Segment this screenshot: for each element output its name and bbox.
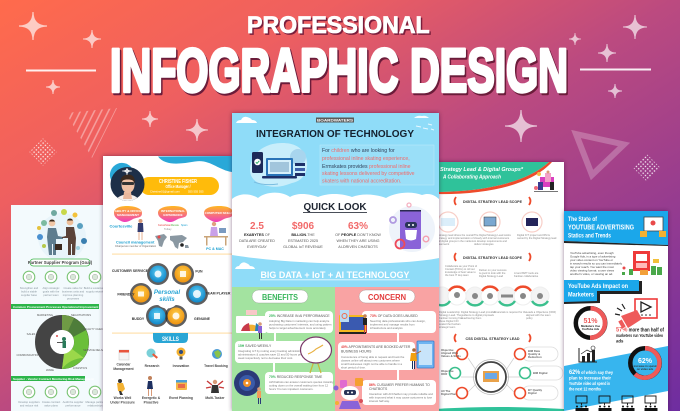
cloud bottom left [235, 262, 255, 269]
illustration: team at work [534, 170, 558, 192]
stat: 62 percent [569, 369, 613, 392]
section pill: second scope: DIGITAL STRATEGY LEAD SCOPE [463, 256, 522, 260]
scope text [439, 234, 556, 246]
ribbon heading: YouTube Ads Impact on [568, 283, 628, 290]
stat: exabytes: EVERYDAY [247, 245, 267, 249]
icons: top circle row [23, 271, 101, 283]
outlined triangle decoration [576, 134, 624, 175]
stat: chatbots [335, 221, 381, 249]
stat: 62 percent: 62% of which say they [569, 369, 613, 376]
world map: Turkey [164, 228, 172, 231]
illustration: dial [234, 370, 261, 404]
blob headings: MANAGEMENT [117, 213, 139, 217]
scope text: closely with internal customers [474, 236, 510, 240]
panel: partner supplier infographic [11, 205, 111, 411]
process text: Digital Leadership [439, 310, 460, 314]
card: response time: cutting down on the overall waiting time from 12 [269, 384, 329, 388]
curved header: A Collaborating Approach [442, 174, 501, 180]
text: goal descriptions: supplier base [21, 293, 37, 297]
skills heading: SKILLS [162, 336, 179, 343]
world map: Spain [181, 224, 188, 227]
stat: iot revenue [283, 221, 323, 249]
scope notes: is good to look with the [479, 271, 506, 275]
labels: cycle steps: QUALITY CHECK [83, 327, 105, 331]
illustration: tablet booking [410, 341, 434, 369]
section pill: lead scope [454, 197, 530, 205]
card: response time: hours 'll to two impatient customers. [269, 387, 314, 391]
column: concern [334, 287, 439, 411]
card: saved weekly: administrators & coaches save 15 and 50 hours per [238, 352, 302, 356]
hub diagram: Digital [528, 391, 537, 395]
text: goal descriptions: Align strategic [43, 286, 60, 290]
computer desk [204, 222, 228, 251]
blob headings: ABILITY & OFFICE [115, 209, 141, 213]
card: response time [265, 372, 334, 394]
intro text: tap your reach. You want the most [570, 265, 614, 269]
hub diagram: Objective [441, 348, 454, 352]
card: ai performance: purchasing customers' interests, and using pattern [269, 322, 332, 326]
stat: iot revenue: $906 [292, 221, 315, 232]
stat: chatbots: OF PEOPLE DON'T KNOW [335, 233, 381, 237]
card: ai performance: helps to target advertisement more accurately [269, 326, 326, 330]
wave header [158, 156, 232, 172]
world map [155, 224, 189, 249]
stat: chatbots: AI-DRIVEN CHATBOTS [338, 245, 378, 249]
text box: intro: For children who are looking for [322, 148, 395, 154]
logo tag: BOARDWATERS [317, 118, 353, 122]
intro text: video viewing format: a user views [570, 268, 615, 272]
process text: Leads a Objectives (OKR) [526, 310, 556, 314]
process chain [433, 287, 549, 305]
illustration: gauge [236, 310, 266, 339]
skill icons: row two [117, 376, 224, 396]
striped triangle decoration [69, 108, 117, 158]
labels: cycle steps: SALES [27, 332, 36, 336]
labels: personal skills: TEAM PLAYER [206, 292, 231, 296]
scope text: deliver strategies [474, 242, 494, 246]
stat: 62 percent: YouTube video ad spend in [569, 381, 610, 386]
banner: supplier improvement: Common Procurement Processes Operational Improvement [13, 305, 98, 309]
intro text: your video content on YouTube or [570, 258, 613, 262]
skill labels: row one: Innovation [173, 364, 189, 368]
decorative sparkles [19, 12, 647, 142]
hub diagram: BIM Data [528, 349, 540, 353]
text: bottom descriptions: Audit the supplier [63, 400, 83, 404]
scope notes: Kanban collaborative [514, 274, 539, 278]
process text: scaled the Kanban [439, 322, 461, 326]
card: data unused: 73% OF DATA GOES UNUSED [370, 314, 418, 318]
card: saved weekly: Integrating IoT by routing every booking administrator, [238, 349, 305, 353]
labels: cycle steps: SERVICE DELIVERY [83, 348, 109, 352]
heading: quick look: QUICK LOOK [304, 201, 367, 213]
hub diagram: Objective [441, 369, 454, 373]
card: ai performance [265, 311, 333, 333]
text: bottom descriptions: Manage partner [86, 400, 105, 404]
section pill: css lead: CSS DIGITAL STRATEGY LEAD [466, 337, 520, 341]
card: appointments [338, 342, 415, 370]
scope text: Digital ICT project and RM is [517, 233, 551, 237]
stat: chatbots: WHEN THEY ARE USING [336, 239, 380, 243]
ability column: Council management [116, 240, 155, 244]
scope notes: Deliver on your success [479, 268, 507, 272]
chart: personal skills ring: skills [159, 296, 175, 303]
card: saved weekly [235, 341, 311, 363]
blue lower band [564, 346, 668, 411]
stat: iot revenue: GLOBAL IoT REVENUE [283, 245, 323, 249]
hub diagram: All The [441, 389, 451, 393]
intro text [570, 251, 623, 276]
text box: intro: skating lessons delivered by competitive [322, 171, 415, 177]
card: data unused: infrastructure and analysis [370, 326, 403, 330]
pill: concern: CONCERN [368, 293, 406, 302]
ability column: Courtesville [110, 224, 133, 228]
stat: 57 percent: 57% more than half of [616, 326, 664, 334]
chart: 51 percent donut [576, 308, 605, 338]
bottom strip [435, 407, 564, 411]
process text: guidance to digital proposals [461, 313, 495, 317]
profile photo [110, 163, 144, 202]
skill labels: row one [113, 362, 228, 371]
intro text: Google Ads, is a type of advertising [570, 254, 616, 258]
illustration: devices [250, 143, 307, 187]
ribbon heading [564, 280, 642, 304]
text: goal descriptions: goals with the [43, 290, 60, 294]
hub diagram: Reduction [528, 355, 542, 359]
scope icons [438, 212, 542, 232]
illustration: video platform [622, 251, 662, 275]
text: bottom descriptions: and reduce risk [20, 404, 39, 408]
illustration: easel chart [300, 337, 332, 373]
scope notes: Collaborate as your Point of [445, 264, 477, 268]
curved header [435, 162, 552, 194]
text: goal descriptions: processes [67, 296, 80, 300]
process text: Digital Strategy Lead provides [461, 310, 496, 314]
text: goal descriptions: Strengthen and [20, 286, 39, 290]
chart: 62 percent donut: on video ads [637, 367, 654, 371]
icon: growth bars [579, 346, 597, 362]
text: bottom descriptions: relationships [87, 404, 103, 408]
labels: cycle steps [16, 313, 109, 372]
process text: strategic team [439, 325, 455, 329]
cloud section: quick look [232, 193, 439, 264]
process text [439, 310, 556, 329]
connectors [397, 333, 399, 380]
header band: YOUTUBE ADVERTISING [568, 222, 634, 232]
cloud top left [236, 117, 257, 123]
skill labels: row one: Management [113, 367, 134, 371]
card: data unused: Need big data professionals who can design, [370, 319, 426, 323]
labels: personal skills: CUSTOMER SERVICE [112, 269, 149, 273]
labels: cycle steps: COMMUNICATION [16, 353, 40, 357]
skill labels: row two: Works Well [114, 396, 131, 400]
labels: personal skills: FUN [195, 270, 203, 274]
text: goal descriptions: Create value for [63, 286, 83, 290]
heading: big data iot ai: BIG DATA + IoT + AI TECHNOLOGY [260, 270, 410, 281]
stat: iot revenue: BILLION-THE [291, 233, 315, 237]
intro text: another's video, or viewing an ad. [570, 272, 613, 276]
card: data unused: implement and manage results from [370, 322, 415, 326]
scope text: all digital groups in the markets [438, 239, 474, 243]
chart: 51 percent donut: 51% [583, 318, 598, 325]
skill labels: row two: Multi-Tasker [205, 396, 225, 400]
section pill: lead scope: DIGITAL STRATEGY LEAD SCOPE [463, 200, 522, 204]
card: appointments: Convenience of being able to request and book the [341, 355, 405, 359]
world map: Russia [171, 224, 179, 227]
skill labels: row two [110, 396, 224, 404]
column: benefits [232, 287, 335, 411]
text: bottom descriptions: value plans [44, 404, 58, 408]
connectors [274, 333, 275, 372]
stat: exabytes: EXABYTES OF [244, 233, 271, 237]
scope notes: AI and BI/IT tools are [514, 271, 539, 275]
panel title: INTEGRATION OF TECHNOLOGY [256, 128, 414, 140]
stat: exabytes [239, 221, 275, 249]
intro text: in search results so you can immediately [570, 262, 623, 266]
card: ai performance: 25% INCREASE IN AI PERFORMANCE [269, 314, 330, 318]
heading: professional: PROFESSIONAL [247, 12, 430, 38]
icon: hands holding tablet [640, 217, 666, 237]
text: bottom descriptions: Develop suppliers [18, 400, 40, 404]
hub diagram: Aligned With [441, 351, 458, 355]
panel: youtube advertising infographic [564, 211, 668, 411]
section pill: second scope [454, 253, 530, 261]
dot grid left [29, 138, 57, 166]
card: appointments: classes online will attract new customers where [341, 358, 400, 362]
world map: Kazakhstan [158, 224, 172, 227]
illustration: handshake [37, 209, 87, 261]
ability column: Chairperson member of Organization [115, 245, 157, 248]
card: response time: AI/Chatbots can answer customers queries instantly, [269, 380, 334, 384]
chart: 51 percent donut: YouTube Ads [582, 327, 600, 331]
text: goal descriptions: supply network [86, 290, 105, 294]
icons: bottom circle row [23, 386, 101, 398]
name banner: Office Manager / [166, 184, 191, 189]
cloud top right [414, 116, 429, 118]
stat: exabytes: DATA ARE CREATED [239, 239, 275, 243]
card: saved weekly: 15H SAVED WEEKLY [238, 344, 272, 348]
text: goal descriptions: business units and [62, 290, 85, 294]
stat: iot revenue: ESTIMATED 2025 [288, 239, 318, 243]
scope text: teamwork [438, 242, 450, 246]
process text: aligned with the team [526, 313, 551, 317]
process text: Strategy Lead. The [439, 313, 462, 317]
scope notes [445, 265, 538, 278]
skill labels: row one: Research [145, 364, 159, 368]
hub diagram: OKR [441, 372, 447, 376]
blob headings: COMPUTER SKILLS [205, 211, 233, 215]
hub diagram [441, 347, 563, 400]
icon: megaphone and play screen [615, 299, 657, 328]
scope text: owned by the Digital Strategy lead [517, 236, 557, 240]
card: human vs chatbot: Interaction with AI/Chatbot may provide reliable and [369, 392, 433, 396]
name banner: Christine01@gmail.com [150, 190, 180, 194]
labels: cycle steps: NEGOTIATIONS [71, 313, 91, 317]
name banner: 555 555 555 [188, 190, 204, 194]
computer desk: PC & MAC [206, 247, 224, 251]
card: appointments: BUSINESS HOURS [341, 350, 372, 354]
section pill: css lead [454, 334, 530, 342]
card: appointments: 40% APPOINTMENTS ARE BOOKED AFTER [341, 345, 411, 349]
heading: professional: PROFESSIONAL [248, 13, 431, 40]
card: appointments: small businesses might not be able to handle in a [341, 362, 403, 366]
header band: The State of [568, 216, 598, 223]
text box: intro [320, 145, 434, 185]
skills heading [153, 333, 188, 343]
illustration: robot headset [334, 378, 363, 409]
scope notes: Contact (POCs) to roll out [445, 267, 475, 271]
text: goal descriptions: improve planning [63, 293, 84, 297]
text box: intro: professional inline skating experience, [322, 156, 410, 162]
hub diagram: Digital Plan [441, 392, 457, 396]
text: goal descriptions: partner team [43, 293, 59, 297]
card: human vs chatbot: 86% CUSUMER PREFER HUMANS TO [369, 383, 430, 387]
divider [112, 254, 232, 255]
text box: intro: Ermskates provides professional inline [322, 164, 411, 170]
chart: personal skills ring: Personal [154, 289, 180, 296]
text box: intro: skaters with national accreditation. [322, 178, 401, 184]
pill: benefits: BENEFITS [262, 293, 299, 302]
card: ai performance: Adopting Big Data in marketing can help analyze [269, 319, 330, 323]
card: human vs chatbot: interest half way. [369, 399, 390, 403]
header band: Statics and Trends [568, 232, 611, 240]
hub diagram: BY Quality [528, 388, 543, 392]
hub diagram: Quality & [528, 352, 540, 356]
text: bottom descriptions: performance [65, 404, 81, 408]
stat: 57 percent [616, 326, 664, 344]
scope text: The Digital Strategy Lead works [474, 233, 511, 237]
header band [564, 211, 668, 246]
text: goal descriptions: Build a sustainable [84, 286, 107, 290]
chart: personal skills ring [130, 263, 208, 327]
text: bottom descriptions [18, 401, 103, 407]
curved header: Strategy Lead & Digital Groups* [440, 167, 524, 173]
labels: cycle steps: MARKETING [37, 313, 53, 317]
card: human vs chatbot: CHATBOTS [369, 387, 388, 391]
chart: 62 percent donut: 62% [638, 358, 653, 365]
process icons [454, 292, 543, 299]
text: goal descriptions: build a stable [21, 290, 37, 294]
stat: 62 percent: the next 12 months [569, 386, 601, 392]
scope notes: knowledge of best value to [445, 270, 476, 274]
dot grid right [633, 154, 661, 182]
skill labels: row two: Under Pressure [110, 400, 135, 404]
name banner [140, 177, 219, 195]
stat: 57 percent: marketers run YouTube video [616, 333, 663, 338]
pill: partner supplier program: Partner Supplier Program (Goal) [28, 260, 93, 265]
stat: 57 percent: ads [616, 338, 624, 344]
ability column [110, 219, 157, 248]
card: data unused [362, 311, 436, 333]
birds [416, 124, 434, 130]
skill labels: row two: Proactive [144, 400, 159, 404]
process text: Kanban Coming from [439, 316, 464, 320]
card: response time: 70% REDUCED RESPONSE TIME [269, 375, 323, 379]
process text: Financials is required for the [494, 310, 527, 314]
labels: personal skills: GENUINE [194, 317, 211, 321]
process text: these Digital CIO [439, 319, 459, 323]
card: saved weekly: week respectively not to decrease their cost. [238, 356, 293, 360]
text: bottom descriptions: Create contract [42, 400, 60, 404]
stat: chatbots: 63% [348, 221, 368, 232]
chart: cycle donut [42, 315, 89, 369]
scope text: Strategy lead drives the overall [438, 233, 474, 237]
labels: personal skills: FRIENDLY [117, 292, 135, 296]
icon row: monitors and audiences [576, 396, 658, 411]
chart: 51 percent donut: Marketers Use [581, 324, 601, 328]
blob headings: INTERNATIONAL [161, 209, 185, 213]
labels: personal skills [112, 269, 231, 321]
labels: personal skills: BUDDY [132, 317, 145, 321]
skill labels: row two: Energetic & [142, 396, 161, 400]
panel: integration of technology infographic [232, 113, 439, 411]
chart: 62 percent donut: increase in spend [634, 364, 657, 368]
blob headings [114, 206, 233, 222]
illustration: analytics monitor [339, 310, 367, 334]
illustration: chatbot phone [389, 203, 435, 252]
card: human vs chatbot [362, 380, 436, 405]
scope notes: the best IT dep team [445, 273, 469, 277]
card: human vs chatbot: with improved what it may cause customers to lose [369, 396, 433, 400]
scope text: to develop requirements and [474, 239, 507, 243]
chart: 62 percent donut [630, 348, 660, 378]
labels: cycle steps: WARE [46, 368, 54, 372]
panel: resume skills infographic [103, 156, 233, 411]
text: goal descriptions [20, 287, 103, 300]
scope text: strategy and implementation of [438, 236, 474, 240]
hub diagram: Values & Skills [441, 354, 461, 358]
hub diagram: BIM Digital [533, 371, 548, 375]
blob headings: EXPERIENCE [163, 213, 183, 217]
name banner: CHRISTINE FISHER [159, 179, 197, 185]
ribbon heading: Marketers [568, 292, 594, 298]
skill labels: row one: Travel Booking [204, 364, 228, 368]
scope notes: Digital Strategy Lead [479, 274, 504, 278]
process text: to achieving them [461, 316, 481, 320]
skill icons: row one [119, 348, 222, 360]
stat: 62 percent: plan to increase their [569, 376, 611, 380]
skill labels: row one: Calendar [116, 362, 131, 366]
labels: cycle steps: LOGISTICS [73, 366, 87, 370]
intro text: YouTube advertising, even though [570, 251, 614, 255]
process text: policy [526, 316, 533, 320]
card: appointments: short period of time. [341, 366, 366, 370]
stat: exabytes: 2.5 [250, 221, 264, 232]
panel: digital strategy infographic [433, 162, 564, 411]
skill labels: row two: Event Planning [169, 396, 193, 400]
divider [112, 332, 232, 334]
decorative rules [26, 68, 651, 72]
banner: supplier management: Supplier - Vendor Contract Monitoring Risk Management [13, 377, 94, 381]
